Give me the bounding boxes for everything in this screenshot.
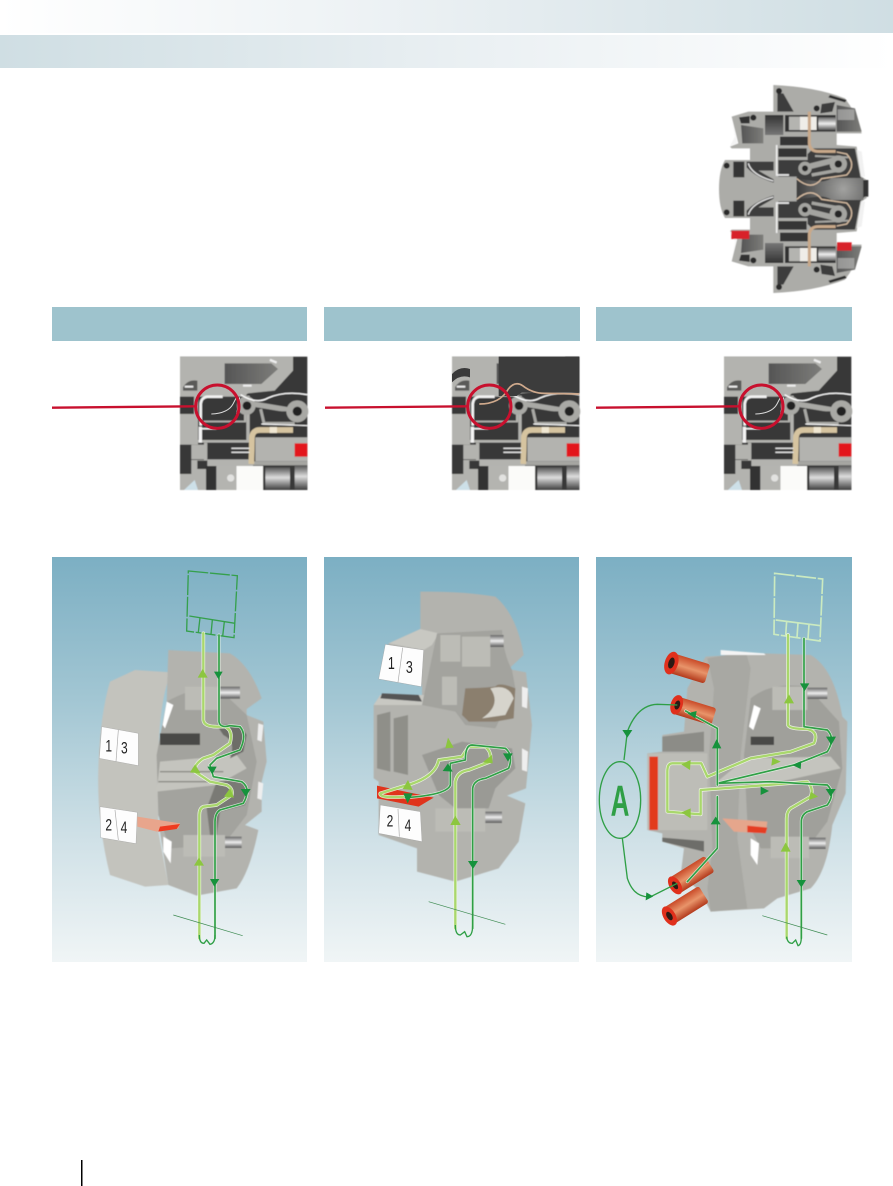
column header bar 3 — [596, 307, 852, 341]
cross-section diagram of terminal block — [719, 85, 868, 293]
ammeter leads — [622, 704, 677, 897]
terminal labels 2 4: 4 — [405, 817, 411, 836]
red test pins — [659, 650, 717, 928]
flow arrows — [190, 669, 251, 887]
red test plug — [377, 786, 434, 807]
header band top — [0, 0, 893, 33]
device body 1 — [98, 650, 267, 896]
panel 2: current path with test plug removed — [324, 557, 579, 962]
flow arrows — [622, 683, 836, 900]
current wires — [667, 635, 831, 946]
detail photo 2 with red callout — [325, 357, 580, 490]
terminal labels 1 3: 3 — [121, 740, 128, 758]
detail photo 3 with red callout — [596, 357, 852, 490]
terminal labels 1 3: 1 — [388, 654, 395, 674]
terminal labels 1 3: 3 — [406, 658, 413, 678]
panel 3: current measurement with ammeter — [596, 557, 852, 962]
column header bar 2 — [324, 307, 580, 341]
footer rule — [81, 1160, 82, 1186]
terminal labels 2 4: 2 — [387, 813, 393, 831]
current wires — [380, 745, 511, 937]
flow arrows — [403, 738, 513, 869]
device body 3 — [647, 650, 847, 912]
ammeter symbol: A — [611, 777, 629, 825]
red test plug — [137, 817, 180, 832]
terminal labels 2 4 — [100, 807, 137, 844]
column header bar 1 — [52, 307, 307, 341]
schematic transformer box — [774, 573, 823, 641]
terminal labels 2 4: 4 — [121, 819, 127, 838]
header band second — [0, 35, 893, 68]
terminal labels 1 3 — [99, 727, 138, 766]
ammeter symbol — [599, 762, 641, 838]
detail photo 1 with red callout — [52, 357, 308, 490]
panel 1: current path through block — [52, 557, 307, 962]
terminal labels 1 3: 1 — [105, 738, 112, 756]
device body 2 — [374, 592, 532, 882]
schematic transformer box — [187, 571, 237, 638]
indicator: red marks — [731, 231, 852, 251]
current wires — [173, 633, 247, 944]
terminal labels 1 3 — [379, 644, 424, 687]
terminal labels 2 4 — [379, 805, 422, 842]
terminal labels 2 4: 2 — [105, 817, 112, 835]
